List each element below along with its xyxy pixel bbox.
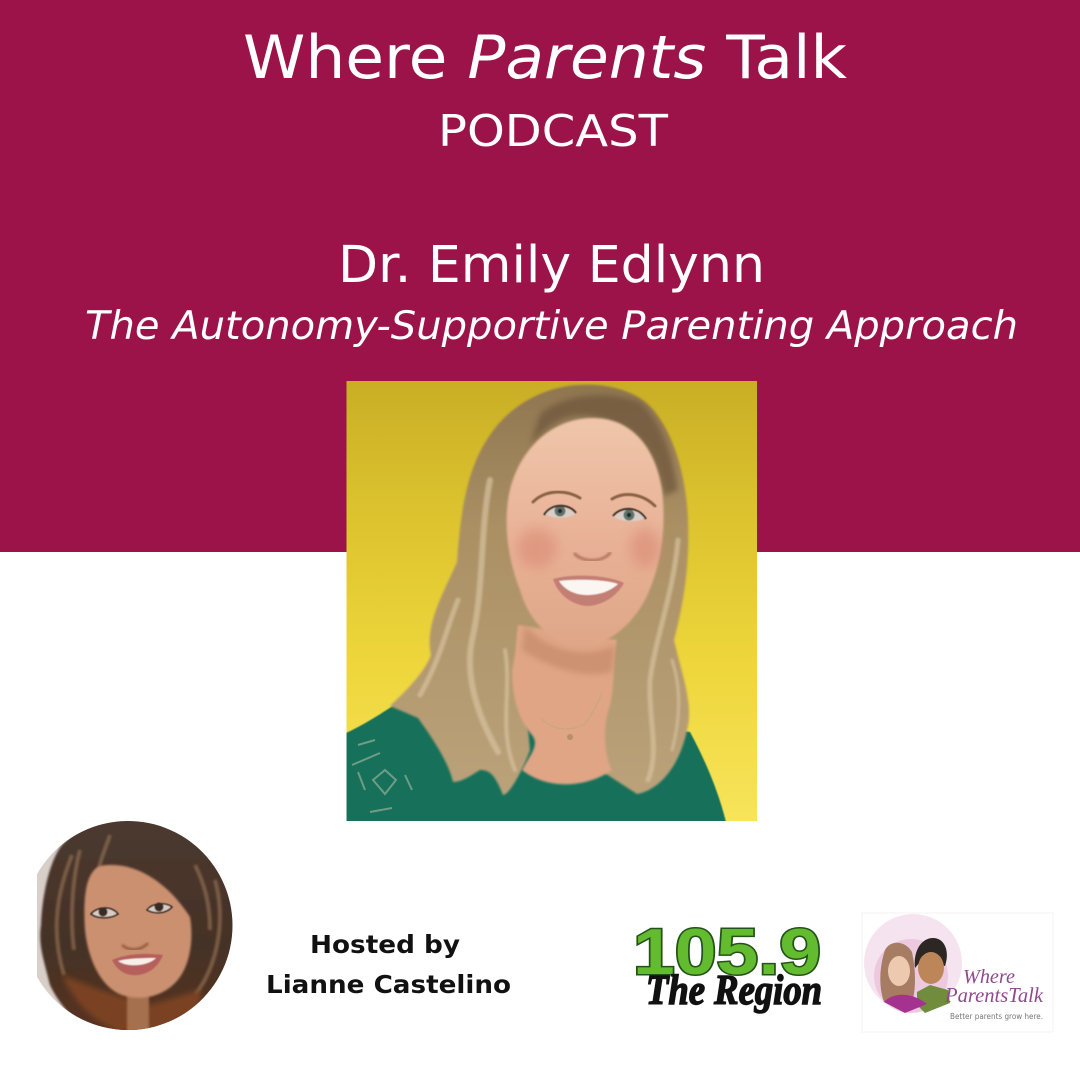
blond highlights: [420, 480, 679, 780]
hair shadow tone near parting: [530, 395, 678, 496]
cheeks: [517, 528, 557, 568]
host eyes: [91, 902, 172, 918]
eyes: [544, 506, 646, 521]
guest name: Dr. Emily Edlynn: [338, 236, 765, 295]
host circular portrait: [37, 821, 232, 1030]
title: Where Parents Talk: [243, 23, 847, 93]
logo: 105.9 The Region: [633, 915, 822, 1014]
logo: Where Parents Talk: Where: [963, 966, 1015, 988]
host face: [84, 865, 191, 998]
episode topic: The Autonomy-Supportive Parenting Approach: [85, 304, 1018, 349]
logo: Where Parents Talk: ParentsTalk: [944, 983, 1044, 1007]
lace pattern on top: [352, 740, 412, 812]
host neck: [127, 995, 149, 1033]
host auburn ends: [62, 975, 201, 1032]
nose: [575, 553, 610, 560]
host nose: [122, 943, 148, 949]
necklace: [541, 692, 602, 729]
hair mass: [390, 385, 689, 795]
face: [507, 418, 664, 646]
logo: Where Parents Talk: [862, 913, 1053, 1032]
crimson header panel: [0, 0, 1080, 552]
hosted by credit: [266, 930, 511, 999]
host smile: [112, 954, 163, 975]
subtitle: podcast: PODCAST: [438, 106, 668, 157]
host hair: [40, 815, 238, 1036]
neck and chest: [512, 625, 617, 784]
logo: 105.9 The Region: The Region: [646, 968, 822, 1014]
logo: 105.9 The Region: 105.9: [633, 915, 821, 988]
hosted by credit: Hosted by: [310, 930, 460, 959]
hosted by credit: Lianne Castelino: [266, 970, 511, 999]
green top: [346, 694, 726, 822]
man and woman figures: [880, 938, 950, 1013]
neck shadow under chin: [522, 625, 615, 674]
host hair highlights: [57, 835, 220, 995]
logo: Where Parents Talk: Better parents grow here.: [950, 1012, 1043, 1021]
smile: [553, 576, 624, 606]
eyebrows: [533, 492, 655, 506]
guest portrait photo illustration: [346, 381, 757, 822]
